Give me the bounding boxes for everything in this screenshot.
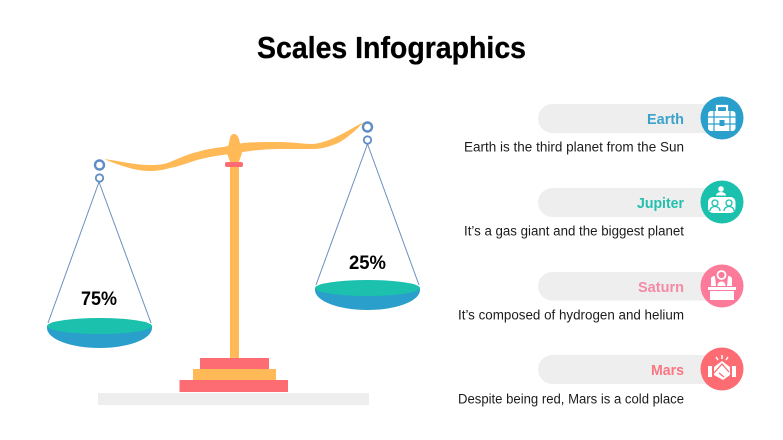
beam pivot knob: [227, 134, 242, 162]
left value: 75%: [81, 289, 117, 310]
icon: briefcase: [700, 96, 744, 140]
right pan bowl: [315, 288, 420, 310]
Mars label: Mars: [651, 362, 684, 379]
scale illustration: [47, 122, 420, 405]
left pan assembly: [47, 160, 152, 348]
icon: handshake: [700, 348, 744, 390]
item: Mars: [458, 348, 744, 406]
Earth label: Earth: [647, 111, 684, 128]
item: Jupiter: [464, 180, 744, 238]
ground shadow: [98, 393, 369, 405]
item: Earth: [464, 96, 744, 154]
left pan bowl: [47, 326, 152, 348]
left rings: [95, 160, 104, 182]
Earth description: Earth is the third planet from the Sun: [464, 140, 684, 154]
title: Scales Infographics: [257, 30, 526, 65]
Saturn label pill: [538, 272, 728, 300]
right value: 25%: [349, 253, 386, 274]
icon: podium speakers: [700, 264, 744, 308]
left pan top: [47, 318, 152, 334]
stepped base: [180, 358, 288, 392]
Jupiter label pill: [538, 188, 728, 217]
balance beam: [104, 122, 364, 171]
Saturn description: It’s composed of hydrogen and helium: [458, 308, 684, 322]
left hanging strings: [48, 182, 151, 323]
right pan assembly: [315, 122, 420, 310]
Mars description: Despite being red, Mars is a cold place: [458, 392, 684, 406]
right hanging strings: [316, 144, 419, 285]
item: Saturn: [458, 264, 744, 322]
Mars label pill: [538, 355, 728, 384]
Saturn label: Saturn: [638, 279, 684, 296]
Jupiter description: It’s a gas giant and the biggest planet: [464, 224, 684, 238]
right rings: [363, 122, 372, 144]
pivot band: [225, 162, 243, 167]
right pan top: [315, 280, 420, 296]
column: [230, 155, 239, 359]
Jupiter label: Jupiter: [637, 195, 684, 212]
Earth label pill: [538, 104, 728, 133]
icon: meeting table: [700, 180, 744, 224]
